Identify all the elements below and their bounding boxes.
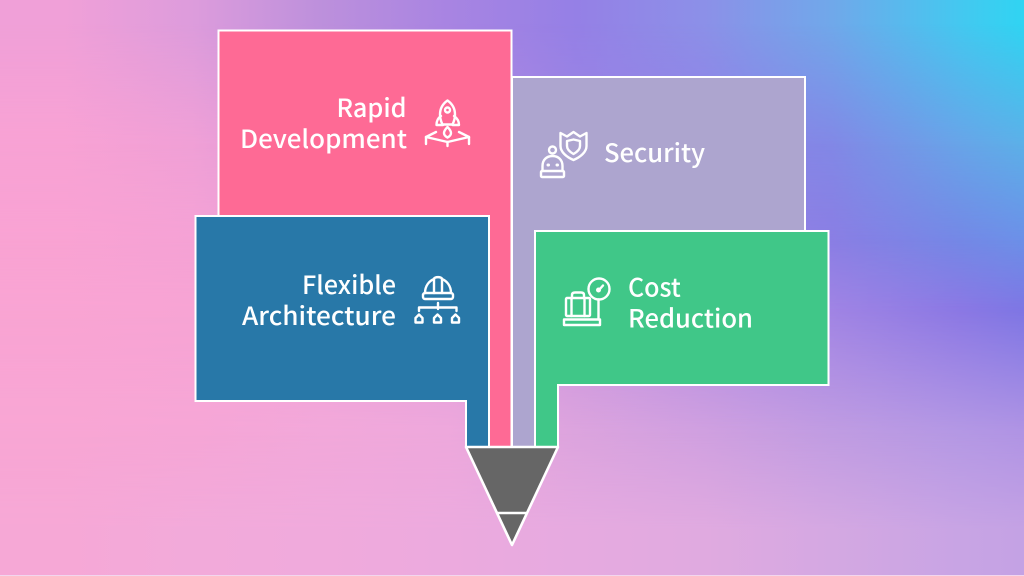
label: flexible architecture bbox=[242, 266, 396, 333]
label: rapid development bbox=[240, 89, 407, 156]
icon: rocket launch bbox=[426, 100, 469, 146]
icon: luggage scale bbox=[564, 278, 610, 325]
icon: helmet hierarchy bbox=[416, 277, 459, 322]
label: rapid development: Development bbox=[240, 120, 407, 156]
label: security: Security bbox=[604, 134, 705, 170]
label: flexible architecture: Architecture bbox=[242, 297, 396, 333]
label: cost reduction bbox=[628, 268, 753, 336]
icon: pencil tip funnel bbox=[466, 447, 558, 545]
panel: security bbox=[512, 77, 805, 447]
panel: rapid development bbox=[218, 30, 512, 447]
label: rapid development: Rapid bbox=[336, 89, 406, 125]
label: flexible architecture: Flexible bbox=[302, 266, 396, 302]
label: cost reduction: Reduction bbox=[628, 300, 753, 336]
panel: cost reduction bbox=[535, 231, 828, 447]
icon: robot and shield bbox=[541, 132, 586, 177]
label: cost reduction: Cost bbox=[628, 268, 681, 304]
panel: flexible architecture bbox=[196, 216, 489, 447]
